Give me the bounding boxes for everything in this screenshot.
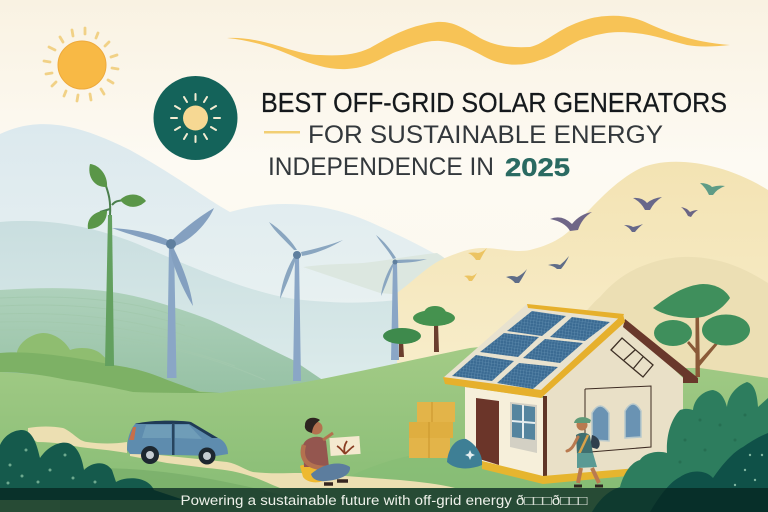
front window (510, 402, 537, 453)
birds (464, 183, 725, 283)
icon: large sun (44, 28, 118, 101)
roof (443, 304, 624, 396)
battery crates (409, 402, 455, 458)
foreground green fields (0, 333, 768, 512)
seated person with sketch board (300, 418, 361, 484)
pale blue mountains (0, 124, 470, 400)
wind turbine 2 (269, 222, 343, 381)
house foundation (482, 461, 638, 484)
child with backpack (567, 417, 603, 486)
arched windows (592, 404, 641, 441)
roof hatch outline (611, 338, 653, 377)
right tree (653, 284, 750, 377)
small trees on hill (383, 306, 455, 357)
house front wall (465, 387, 543, 480)
sand hills (397, 162, 768, 400)
dirt path (28, 426, 455, 488)
storage bag (447, 439, 482, 468)
door (476, 398, 499, 465)
wind turbine 3 (376, 235, 427, 360)
corner post (543, 396, 547, 480)
title: INDEPENDENCE IN (268, 153, 494, 181)
green striped hill (0, 288, 330, 396)
title: 2025 (505, 154, 570, 182)
yellow wave ribbon (227, 16, 730, 69)
title: BEST OFF-GRID SOLAR GENERATORS (261, 87, 727, 118)
title badge (154, 76, 238, 160)
title: FOR SUSTAINABLE ENERGY (308, 121, 663, 149)
title (261, 87, 727, 182)
wall frame outline (585, 386, 651, 452)
left dark bushes (0, 430, 184, 500)
plant-shaped tower with leaves (88, 164, 146, 366)
wind turbine 1 (112, 208, 214, 378)
solar panels (452, 311, 610, 389)
house side wall (543, 322, 683, 480)
caption bar (0, 488, 768, 512)
car (127, 421, 228, 464)
right bushes (592, 382, 768, 512)
roof eave rafter (623, 319, 698, 383)
house with solar roof (443, 304, 698, 484)
caption bar: Powering a sustainable future with off-grid energy ð□□□ð□□□ (180, 493, 588, 508)
